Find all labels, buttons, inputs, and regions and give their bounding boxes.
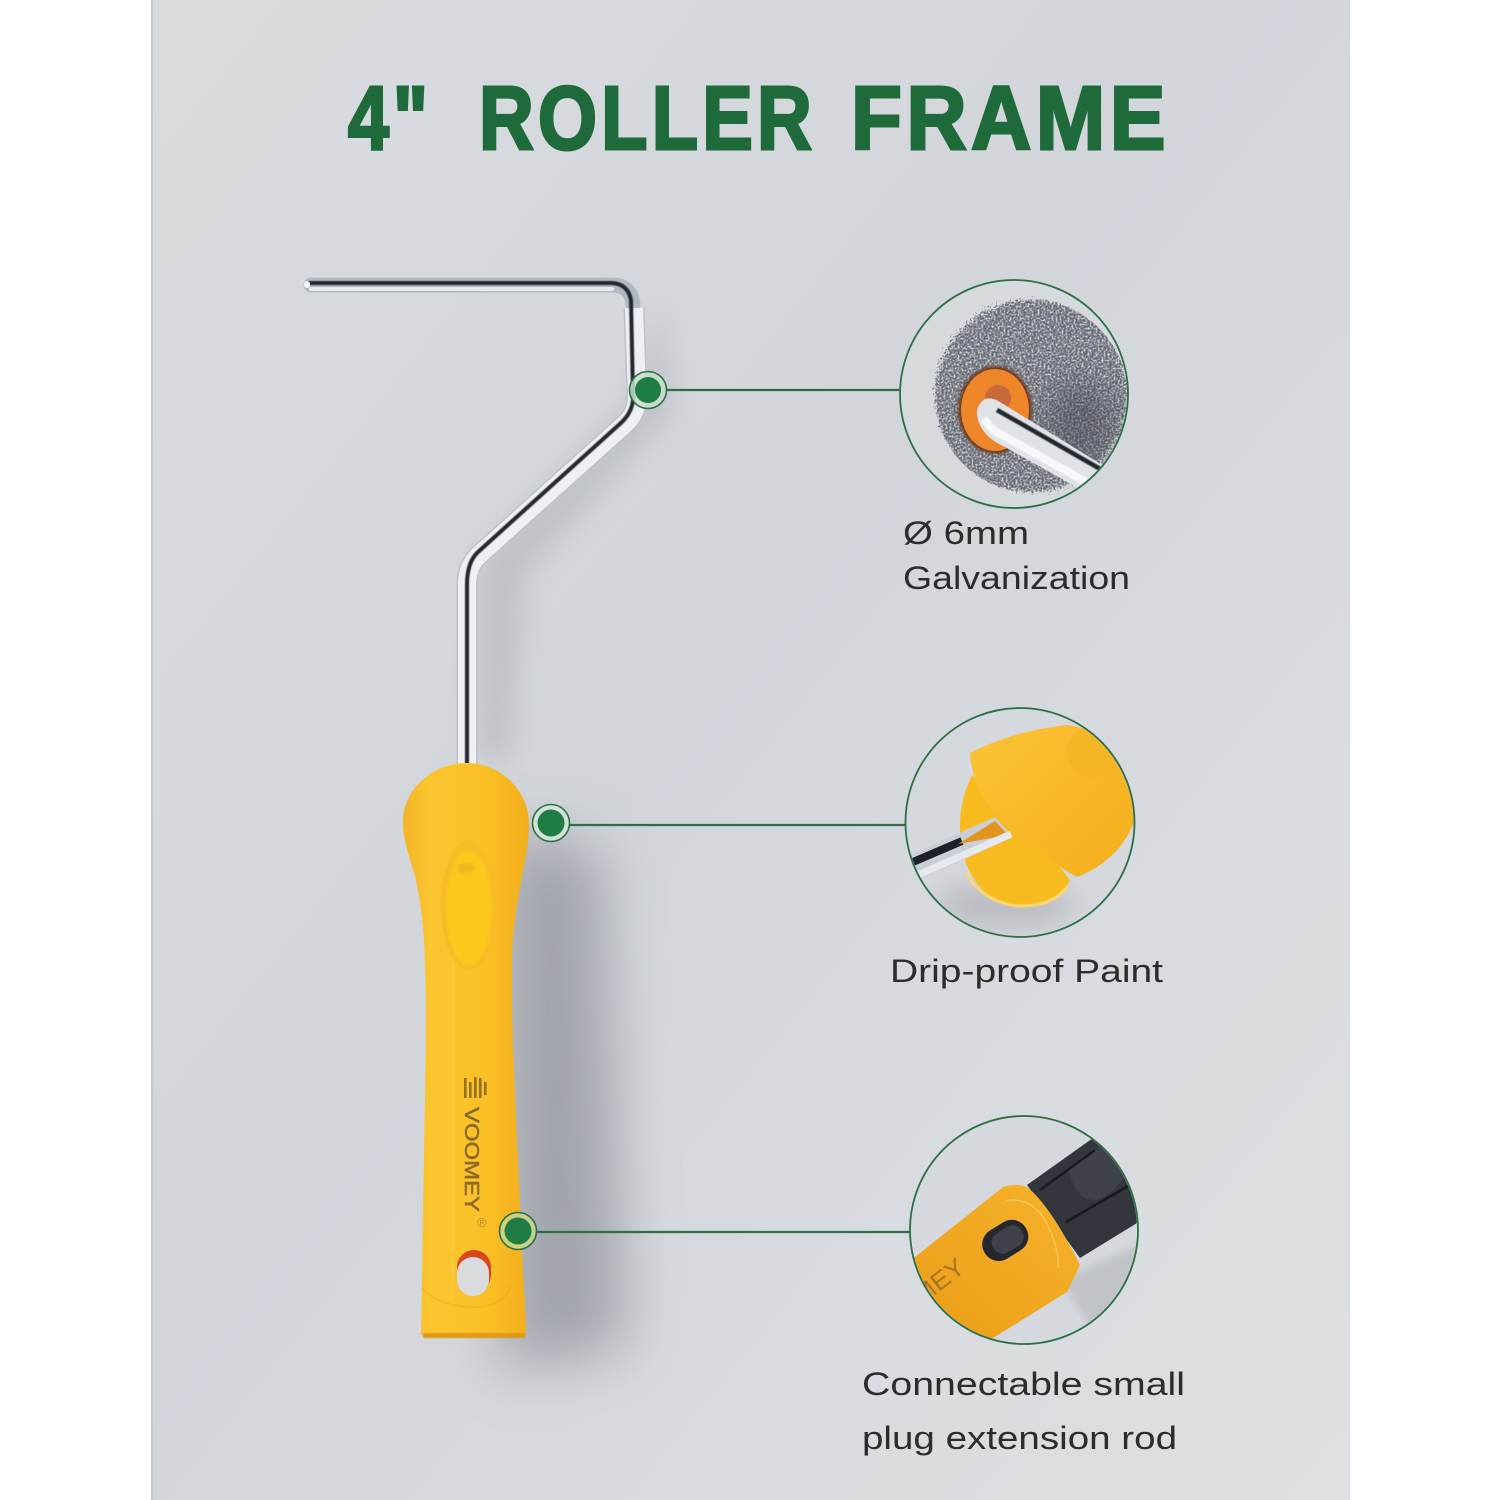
- hanging hole: [457, 1250, 491, 1296]
- caption: drip-proof paint: Drip-proof Paint: [890, 953, 1163, 989]
- detail circle: connectable plug: MEY: [907, 1253, 971, 1311]
- callout: wire pointer: [630, 372, 899, 408]
- title: FRAME: [851, 69, 1170, 169]
- detail circle: roller cover and wire: [900, 280, 1128, 508]
- title: 4": [348, 69, 432, 169]
- roller wire frame: [307, 283, 637, 768]
- detail circle: connectable plug: [900, 1116, 1150, 1350]
- caption: diameter and galvanization: Galvanization: [903, 560, 1130, 596]
- detail circle: drip-proof cap: [906, 708, 1136, 937]
- callout: handle end pointer: [500, 1212, 910, 1250]
- brand logo: [460, 1077, 487, 1230]
- yellow handle: [403, 763, 529, 1338]
- background panel: [151, 0, 1350, 1500]
- brand logo: VOOMEY: [460, 1107, 482, 1212]
- title: [348, 69, 1170, 169]
- thumb recess: [441, 840, 497, 970]
- callout: handle pointer: [532, 804, 906, 842]
- caption: diameter and galvanization: [903, 515, 1130, 596]
- brand logo: ®: [477, 1215, 487, 1230]
- caption: connectable extension rod: [862, 1366, 1185, 1456]
- cast shadows of roller frame: [478, 300, 672, 1370]
- title: ROLLER: [479, 69, 816, 169]
- caption: connectable extension rod: plug extension rod: [862, 1420, 1177, 1456]
- caption: connectable extension rod: Connectable small: [862, 1366, 1185, 1402]
- caption: diameter and galvanization: Ø 6mm: [903, 515, 1029, 551]
